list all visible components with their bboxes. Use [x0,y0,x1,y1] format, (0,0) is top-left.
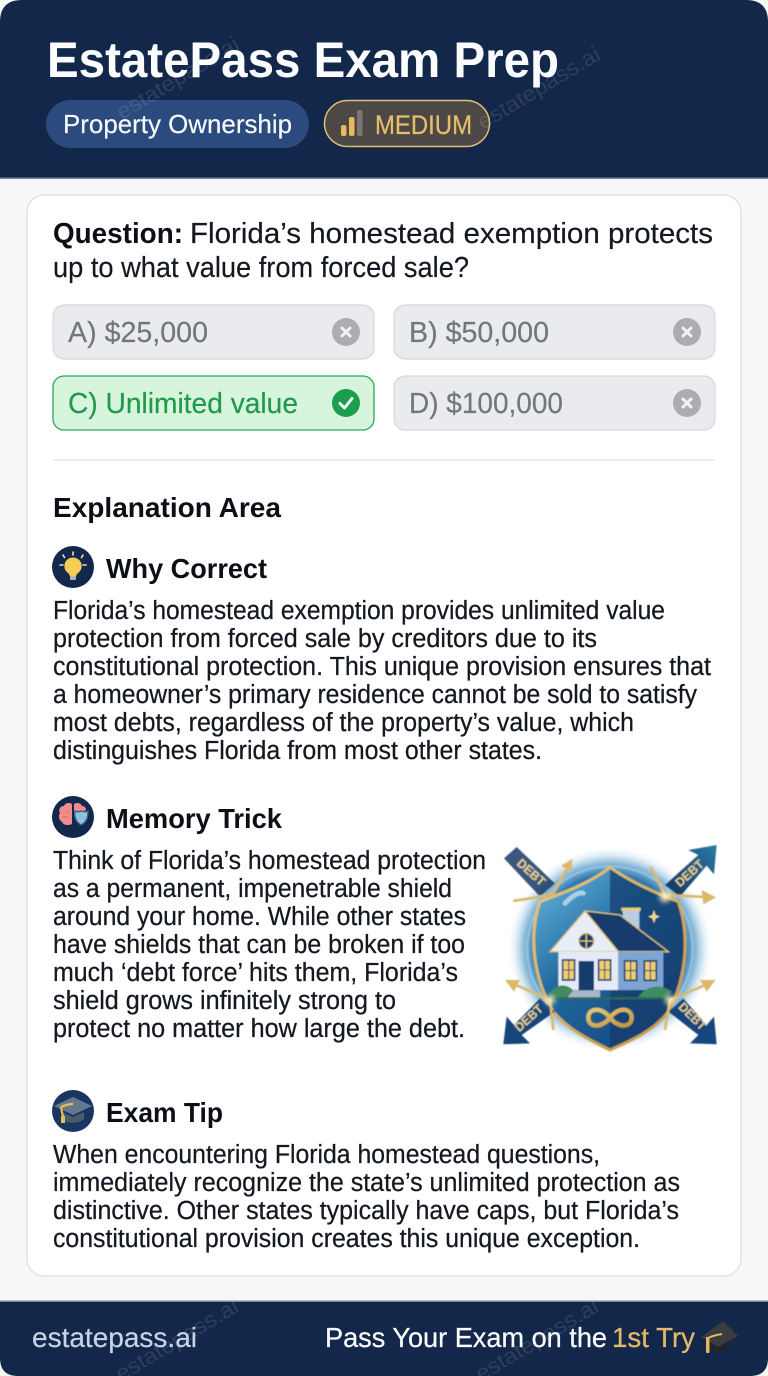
debt arrow: top right [665,845,717,897]
icon: light bulb [52,546,94,588]
icon: graduation cap [52,1090,94,1132]
heading: memory trick: Memory Trick [106,803,282,834]
text: memory trick: Think of Florida’s homestead protection [53,847,486,875]
icon: difficulty bars [341,110,362,136]
text: memory trick: much ‘debt force’ hits them, Florida’s [53,959,458,987]
text: memory trick: as a permanent, impenetrable shield [53,875,452,903]
option D: D) $100,000 [409,388,563,420]
pill: difficulty: MEDIUM [375,110,472,140]
text: exam tip [53,1141,680,1253]
option A [53,305,374,359]
question text: Florida’s homestead exemption protects [190,218,713,250]
gold deflection arrows [505,859,716,1030]
text: why correct: a homeowner’s primary residence cannot be sold to satisfy [53,681,697,709]
debt arrow: top left: DEBT [514,856,548,889]
shield [534,867,685,1050]
debt arrow: bottom left: DEBT [512,1002,546,1035]
text: memory trick: shield grows infinitely strong to [53,987,396,1015]
debt arrow: bottom left [503,998,555,1044]
sparkle [648,910,660,923]
text: why correct: Florida’s homestead exemption provides unlimited value [53,597,665,625]
option C correct: C) Unlimited value [68,388,298,420]
text: memory trick: protect no matter how large the debt. [53,1015,465,1043]
question text: up to what value from forced sale? [53,252,469,284]
question text: Question: [53,218,183,250]
brand: estatepass.ai [32,1322,197,1353]
icon: wrong [673,318,701,346]
house [549,908,672,999]
icon: brain with shield [52,796,94,838]
heading: why correct: Why Correct [106,553,267,584]
watermark: header left: estatepass.ai [112,31,244,124]
heading: exam tip: Exam Tip [106,1097,223,1128]
text: memory trick [53,847,486,1043]
option B [394,305,715,359]
pill: category: Property Ownership [63,109,292,139]
text: exam tip: distinctive. Other states typically have caps, but Florida’s [53,1197,679,1225]
title: EstatePass Exam Prep [47,32,559,88]
text: memory trick: around your home. While other states [53,903,466,931]
panel: question card [27,195,741,1276]
tagline highlight: 1st Try [612,1322,695,1353]
option C correct [53,376,374,430]
text: memory trick: have shields that can be broken if too [53,931,465,959]
illustration: house in shield with debt arrows [503,845,717,1052]
text: why correct: distinguishes Florida from most other states. [53,737,542,765]
watermark: header right: estatepass.ai [473,41,605,134]
question text [53,218,713,284]
text: exam tip: constitutional provision creates this unique exception. [53,1225,640,1253]
debt arrow: top left [504,847,555,897]
icon: footer graduation cap [701,1321,738,1353]
icon: correct [332,389,360,417]
text: exam tip: immediately recognize the state’s unlimited protection as [53,1169,680,1197]
debt arrow: top right: DEBT [673,857,707,890]
option B: B) $50,000 [409,317,549,349]
option D [394,376,715,430]
heading: explanation area: Explanation Area [53,492,281,523]
text: why correct: constitutional protection. This unique provision ensures that [53,653,711,681]
icon: wrong [332,318,360,346]
tagline: Pass Your Exam on the [325,1322,607,1353]
text: why correct: protection from forced sale by creditors due to its [53,625,597,653]
header banner [0,0,768,179]
text: exam tip: When encountering Florida homestead questions, [53,1141,600,1169]
debt arrow: bottom right: DEBT [676,1000,709,1034]
text: why correct [53,597,711,765]
footer banner [0,1293,768,1376]
debt arrow: bottom right [668,998,717,1044]
text: why correct: most debts, regardless of the property’s value, which [53,709,634,737]
pill: category [46,100,309,148]
infinity symbol [588,1010,632,1026]
option A: A) $25,000 [68,317,208,349]
pill: difficulty [324,100,490,146]
icon: wrong [673,389,701,417]
